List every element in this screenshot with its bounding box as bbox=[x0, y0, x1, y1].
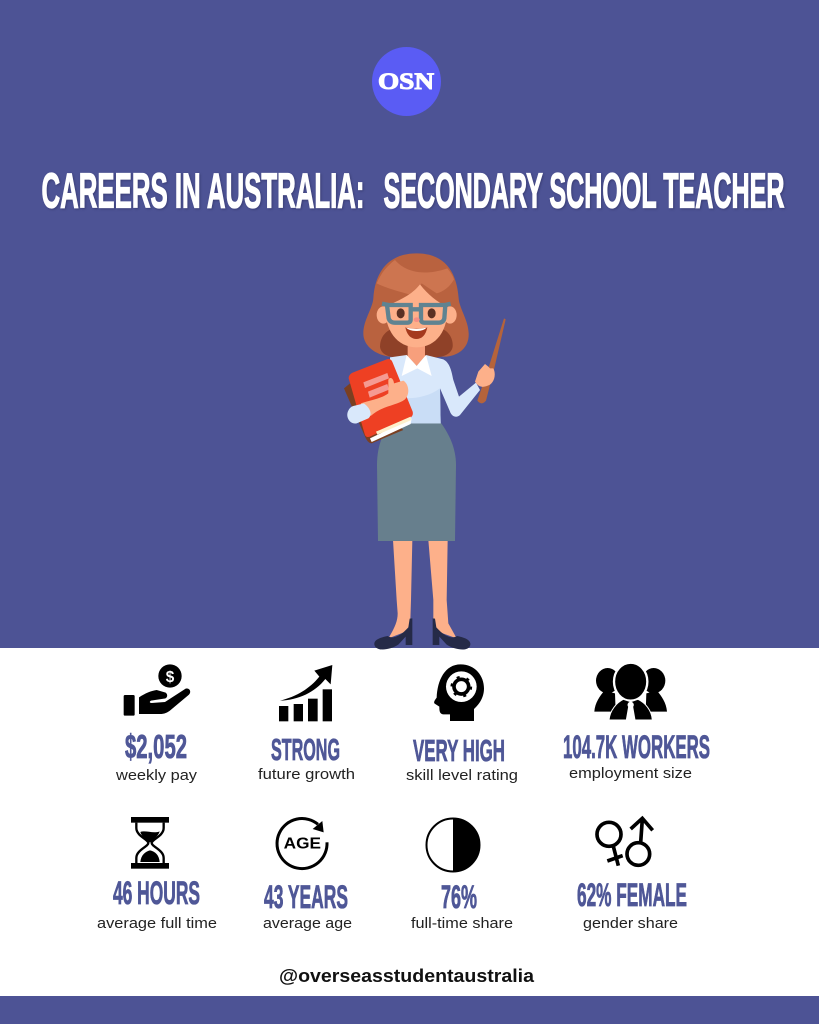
label: weekly pay bbox=[115, 767, 198, 784]
stat: employment size bbox=[563, 663, 710, 782]
label: average age bbox=[263, 915, 352, 932]
neck bbox=[408, 340, 425, 366]
icon: rising bars and arrow bbox=[279, 665, 332, 721]
legs and shoes bbox=[374, 540, 470, 649]
icon: group of three people bbox=[594, 663, 667, 720]
panel: white statistics band bbox=[0, 648, 819, 996]
label: average full time bbox=[97, 915, 217, 932]
icon: hand with dollar coin: $ bbox=[166, 669, 175, 686]
value: 62% FEMALE bbox=[577, 877, 687, 913]
stat: gender share bbox=[577, 818, 687, 932]
icon: head with gear bbox=[434, 664, 484, 721]
book bbox=[344, 383, 403, 443]
stat: average full time bbox=[97, 817, 217, 932]
stat: full-time share bbox=[411, 818, 513, 932]
skirt bbox=[377, 423, 456, 541]
stat: average age bbox=[263, 819, 352, 932]
holding arm bbox=[361, 378, 408, 416]
icon: half-filled circle bbox=[426, 818, 480, 872]
title: CAREERS IN AUSTRALIA: bbox=[42, 164, 364, 218]
value: 46 HOURS bbox=[113, 875, 200, 911]
pointing hand bbox=[475, 364, 495, 387]
icon: age circular arrow: AGE bbox=[284, 835, 321, 852]
nose bbox=[414, 317, 420, 322]
stat: future growth bbox=[258, 665, 355, 783]
label: employment size bbox=[569, 765, 692, 782]
value: VERY HIGH bbox=[413, 733, 505, 768]
icon: female and male symbols bbox=[597, 818, 653, 866]
mouth bbox=[405, 327, 427, 339]
glasses bbox=[382, 304, 451, 323]
label: gender share bbox=[583, 915, 678, 932]
upper body drawn in zoom coordinates bbox=[344, 253, 506, 443]
eyes bbox=[397, 308, 405, 318]
collar bbox=[402, 355, 432, 376]
handle: @overseasstudentaustralia bbox=[279, 966, 535, 986]
face bbox=[377, 306, 390, 324]
value: 76% bbox=[441, 879, 477, 915]
value: STRONG bbox=[271, 732, 340, 767]
stat: weekly pay bbox=[115, 664, 198, 784]
value: $2,052 bbox=[125, 728, 187, 765]
logo: OSN circle bbox=[372, 47, 441, 116]
label: future growth bbox=[258, 766, 355, 783]
illustration: teacher with book and pointer bbox=[344, 253, 506, 649]
value: 43 YEARS bbox=[264, 879, 348, 915]
label: full-time share bbox=[411, 915, 513, 932]
icon: hourglass bbox=[131, 817, 169, 869]
pointer bbox=[477, 318, 506, 403]
logo: OSN circle: OSN bbox=[378, 69, 434, 94]
stat: skill level bbox=[406, 664, 518, 784]
hair back bbox=[363, 253, 469, 357]
label: skill level rating bbox=[406, 767, 518, 784]
shirt bbox=[390, 355, 480, 423]
